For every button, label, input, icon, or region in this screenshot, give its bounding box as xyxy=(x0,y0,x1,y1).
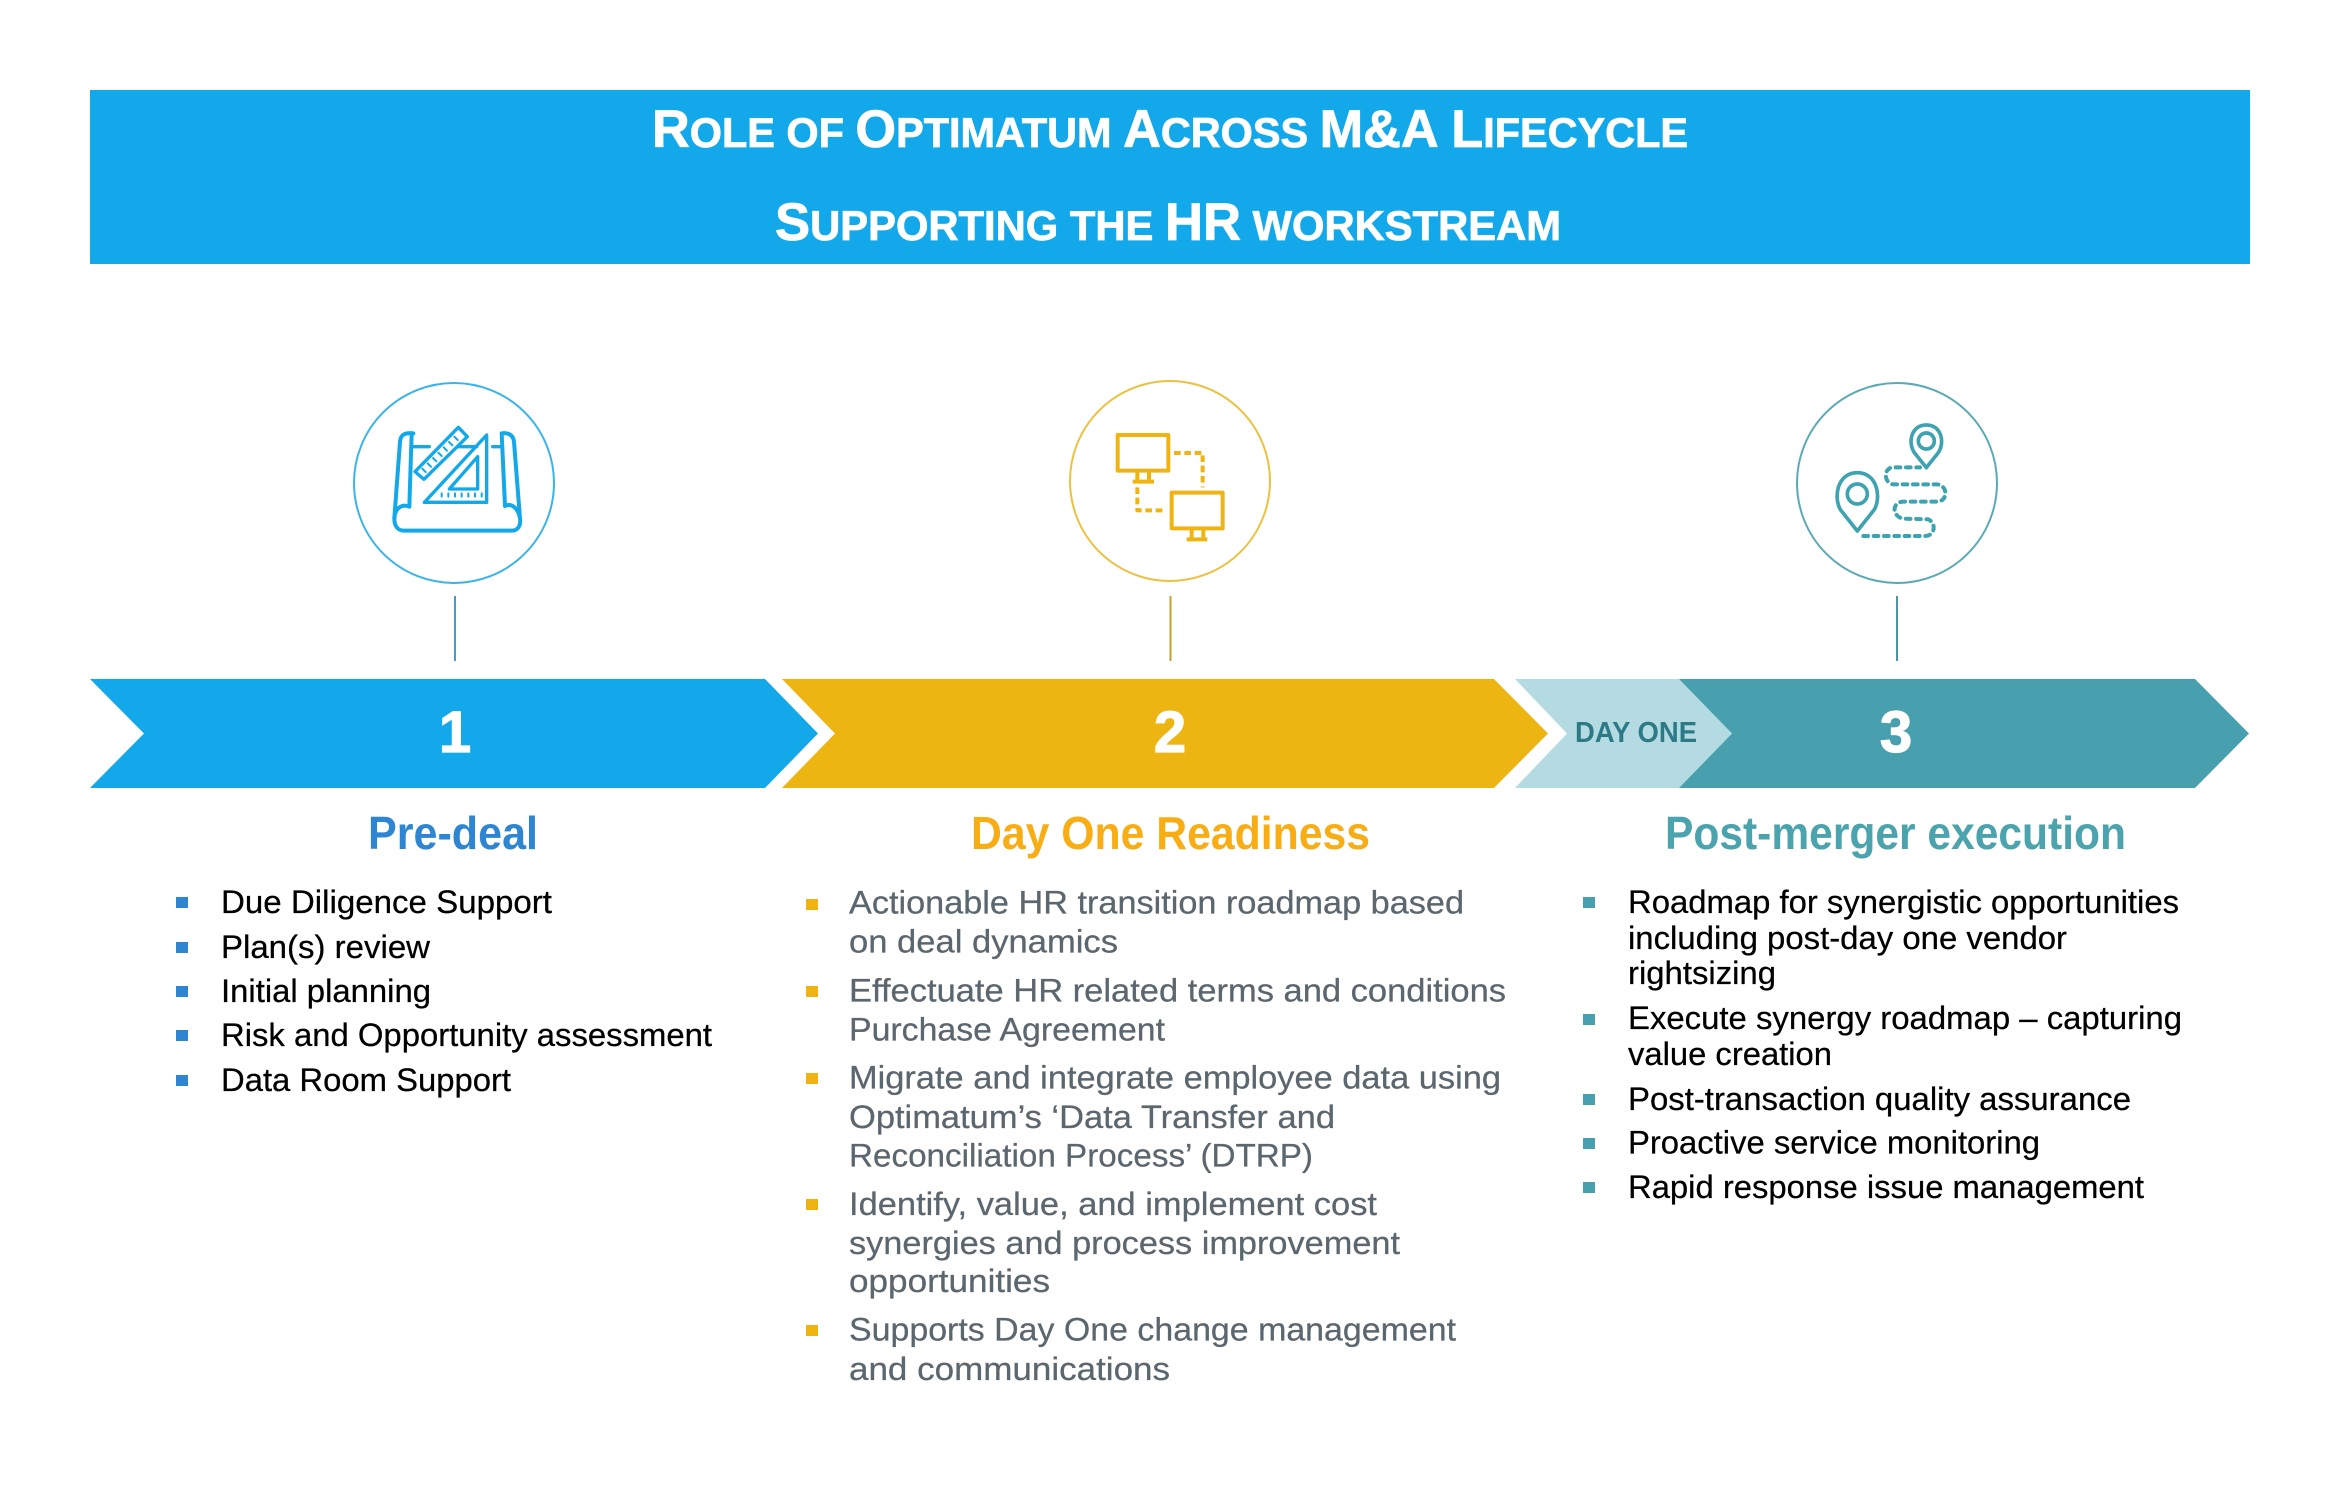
title line 1: ROLE OF OPTIMATUM ACROSS M&A LIFECYCLE xyxy=(652,100,1688,159)
list: pre-deal items: Data Room Support xyxy=(221,1062,511,1098)
panel: pre-deal xyxy=(176,807,712,1098)
arrow 1: 1 xyxy=(439,700,471,765)
heading: day one readiness: Day One Readiness xyxy=(971,807,1370,859)
list: day one readiness items: Purchase Agreement xyxy=(849,1012,1165,1048)
list: post-merger items: Rapid response issue management xyxy=(1628,1169,2144,1205)
icon: blueprint with ruler and set square xyxy=(354,383,554,661)
list: day one readiness items: Migrate and integrate employee data using xyxy=(849,1060,1501,1096)
list: post-merger items: including post-day one vendor xyxy=(1628,920,2067,956)
panel: day one readiness xyxy=(806,807,1506,1387)
list: post-merger items: Execute synergy roadmap – capturing xyxy=(1628,1000,2182,1036)
list: day one readiness items: Identify, value, and implement cost xyxy=(849,1186,1377,1222)
list: day one readiness items: Actionable HR transition roadmap based xyxy=(849,884,1464,920)
list: pre-deal items: Due Diligence Support xyxy=(221,884,552,920)
list: post-merger items: value creation xyxy=(1628,1036,1832,1072)
icon: two connected monitors xyxy=(1070,381,1270,661)
list: pre-deal items xyxy=(176,884,712,1098)
list: day one readiness items xyxy=(806,884,1506,1387)
list: post-merger items: rightsizing xyxy=(1628,955,1776,991)
arrow: day one: DAY ONE xyxy=(1575,717,1697,749)
list: pre-deal items: Risk and Opportunity assessment xyxy=(221,1017,712,1053)
arrow 2 xyxy=(782,679,1548,788)
arrow: day one xyxy=(1515,679,1732,788)
heading: post-merger execution: Post-merger execution xyxy=(1665,807,2126,859)
list: pre-deal items: Plan(s) review xyxy=(221,929,431,965)
arrow 3 xyxy=(1679,679,2249,788)
list: post-merger items xyxy=(1583,884,2182,1205)
list: day one readiness items: Reconciliation Process’ (DTRP) xyxy=(849,1138,1313,1174)
list: post-merger items: Proactive service monitoring xyxy=(1628,1124,2040,1160)
list: post-merger items: Roadmap for synergistic opportunities xyxy=(1628,884,2179,920)
list: day one readiness items: on deal dynamics xyxy=(849,924,1118,960)
icon: route between map pins xyxy=(1797,383,1997,661)
arrow 2: 2 xyxy=(1154,700,1186,765)
list: day one readiness items: Effectuate HR related terms and conditions xyxy=(849,972,1506,1008)
list: day one readiness items: Optimatum’s ‘Data Transfer and xyxy=(849,1099,1335,1135)
list: pre-deal items: Initial planning xyxy=(221,973,431,1009)
list: day one readiness items: and communications xyxy=(849,1351,1170,1387)
heading: pre-deal: Pre-deal xyxy=(368,807,538,859)
panel: post-merger execution xyxy=(1583,807,2182,1205)
arrow 1 xyxy=(90,679,818,788)
list: day one readiness items: Supports Day One change management xyxy=(849,1312,1456,1348)
list: post-merger items: Post-transaction quality assurance xyxy=(1628,1081,2131,1117)
title line 2: SUPPORTING THE HR WORKSTREAM xyxy=(775,193,1561,252)
arrow 3: 3 xyxy=(1880,700,1912,765)
list: day one readiness items: synergies and process improvement xyxy=(849,1225,1400,1261)
title banner xyxy=(90,90,2250,264)
list: day one readiness items: opportunities xyxy=(849,1263,1050,1299)
